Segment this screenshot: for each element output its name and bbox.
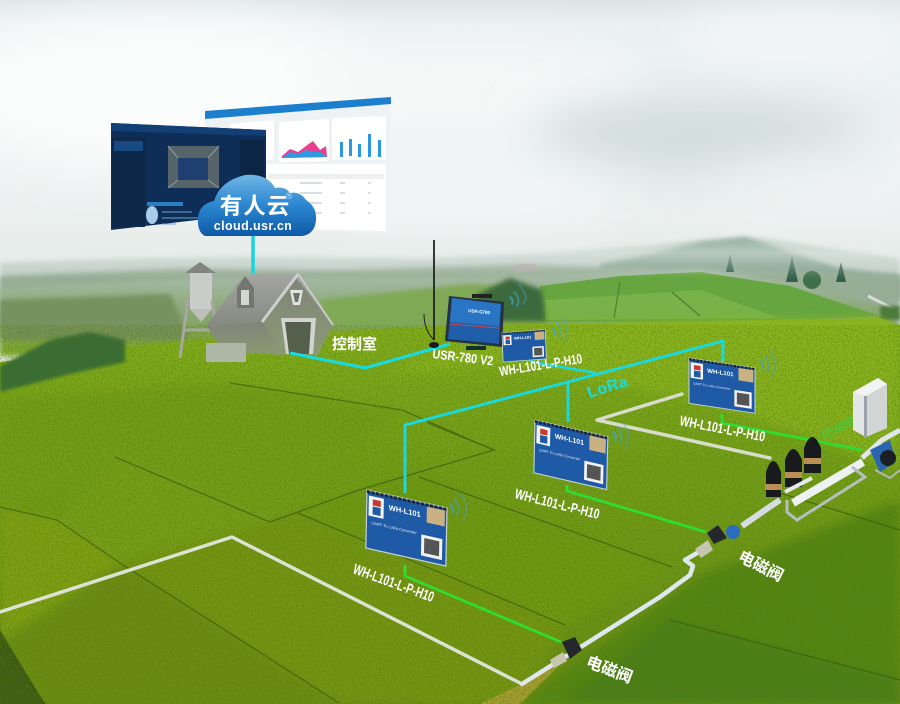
- background: hedge at left: [0, 332, 125, 392]
- label: solenoid valve upper: 电磁阀: [735, 548, 786, 585]
- irrigation equipment: filters and main pipe: [742, 437, 865, 526]
- cloud logo: registered mark: ®: [286, 191, 293, 201]
- pipe run: [742, 500, 780, 526]
- label: solenoid valve lower: 电磁阀: [584, 653, 635, 687]
- background: distant hills: [0, 237, 900, 330]
- cloud logo: [198, 175, 316, 236]
- irrigation equipment: control cabinet: [853, 378, 887, 438]
- green RS485 control lines: [405, 414, 862, 642]
- label: WH-L101 near control room: WH-L101-L-P-H10: [498, 351, 584, 379]
- bar chart: [340, 134, 381, 157]
- cloud platform screen: video dashboard: [111, 123, 266, 230]
- background: sky: [0, 0, 900, 300]
- solenoid valve: lower: [550, 637, 582, 668]
- area chart: [282, 141, 327, 158]
- signal icon: module near control room: [552, 318, 567, 340]
- LoRa module: middle: UART To LoRa Converter: [539, 448, 581, 462]
- LoRa module: lower: UART To LoRa Converter: [371, 520, 417, 535]
- label: WH-L101 lower: WH-L101-L-P-H10: [351, 561, 436, 605]
- LoRa module: middle: [534, 420, 608, 490]
- silo: [180, 262, 220, 358]
- background: main rice field: [0, 318, 900, 704]
- label: LoRa: LoRa: [585, 373, 630, 402]
- background: far terraced fields: [0, 228, 900, 356]
- LoRa module: lower: WH-L101: [389, 503, 421, 519]
- LoRa module: right: WH-L101: [707, 369, 734, 378]
- label: WH-L101 middle: WH-L101-L-P-H10: [513, 486, 601, 522]
- label: WH-L101 right: WH-L101-L-P-H10: [678, 413, 767, 445]
- filter cylinders: [765, 437, 821, 497]
- irrigation pipes: buried white pipe: [0, 394, 770, 684]
- data table: [230, 164, 386, 231]
- field boundary lines: [0, 383, 900, 704]
- LoRa module: right: [689, 358, 755, 413]
- LoRa module: near control room: WH-L101: [514, 334, 532, 341]
- LoRa module: lower: [366, 490, 447, 566]
- LoRa module: near control room: [502, 330, 546, 362]
- LoRa module: middle: WH-L101: [555, 433, 584, 447]
- cloud platform screen: monitoring dashboard: [205, 97, 391, 233]
- windows: [290, 290, 303, 305]
- field patches: [0, 318, 900, 704]
- label: RS485: RS485: [819, 413, 858, 443]
- LoRa cyan network lines: [290, 341, 723, 493]
- cloud-to-barn link: [251, 232, 255, 274]
- cloud logo: url: cloud.usr.cn: [214, 219, 292, 233]
- signal icon: lower module: [450, 494, 467, 520]
- antenna: [433, 240, 435, 340]
- LoRa module: right: UART To LoRa Converter: [693, 381, 731, 391]
- irrigation equipment: pump: [862, 430, 900, 478]
- crate: [206, 343, 246, 362]
- signal icon: middle module: [613, 423, 629, 448]
- label: USR-780 V2: USR-780 V2: [432, 346, 495, 369]
- gateway USR-780 V2: [424, 240, 504, 350]
- control room barn: [180, 262, 333, 362]
- label: control room: 控制室: [332, 335, 377, 353]
- door: [281, 318, 316, 354]
- gateway USR-780 V2: USR-G780: [468, 308, 491, 315]
- signal icon: gateway: [510, 285, 526, 306]
- signal icon: right module: [760, 351, 776, 376]
- cloud logo: brand name: 有人云: [220, 194, 290, 219]
- solenoid valve: upper: [695, 525, 740, 558]
